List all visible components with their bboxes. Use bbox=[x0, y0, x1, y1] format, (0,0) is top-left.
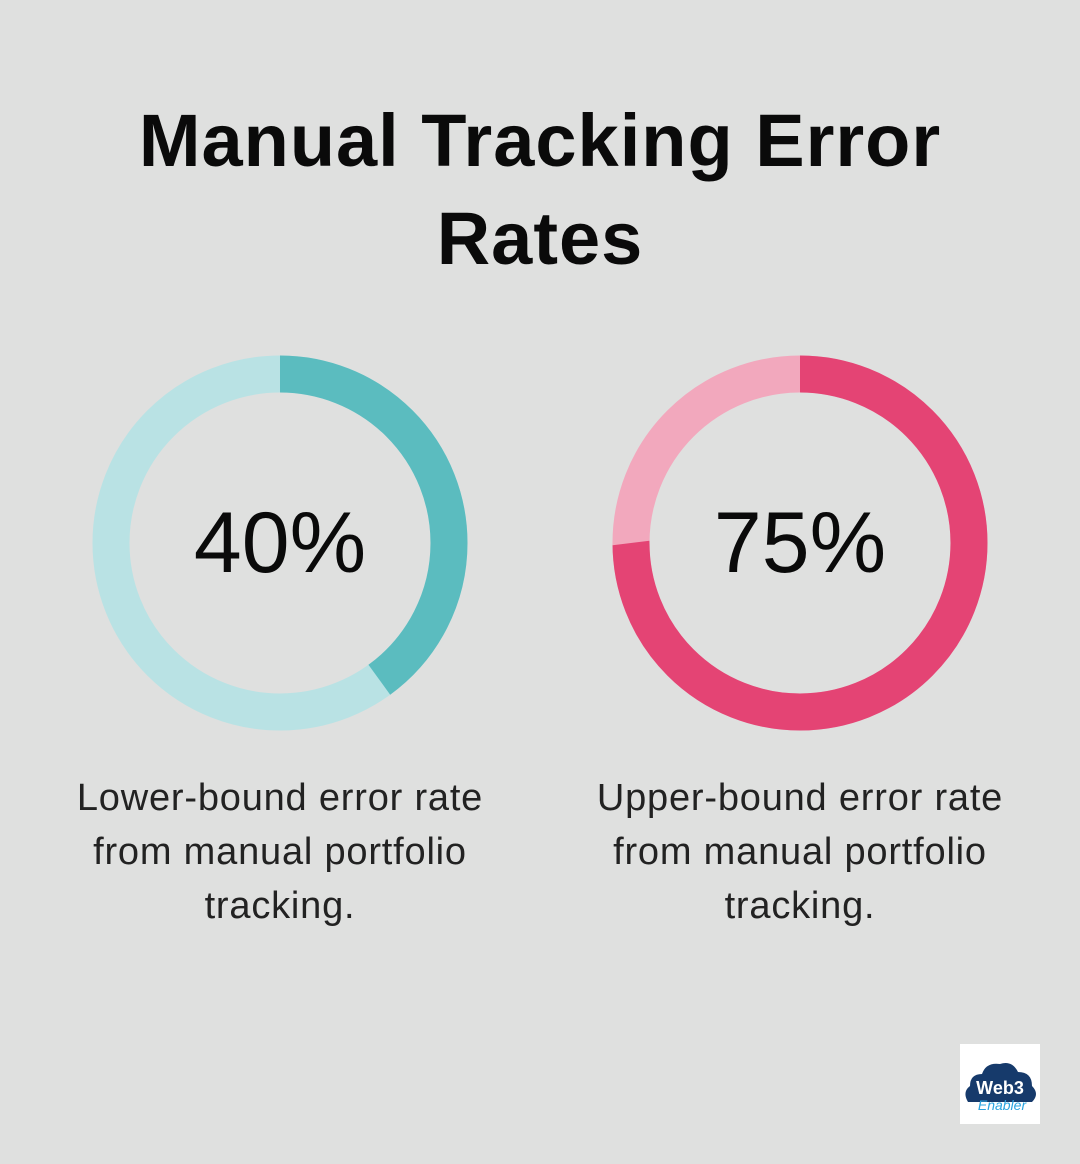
caption left: Lower-bound error rate from manual portfolio tracking. bbox=[77, 777, 483, 927]
logo: Enabler bbox=[978, 1097, 1027, 1113]
donut: 40%: 40% bbox=[194, 495, 366, 591]
title: Manual Tracking Error bbox=[139, 99, 941, 182]
logo: Web3 bbox=[976, 1078, 1024, 1098]
title: Rates bbox=[437, 197, 643, 280]
donut: 40% bbox=[92, 356, 468, 730]
donut: 75%: 75% bbox=[714, 495, 886, 591]
title bbox=[139, 99, 941, 280]
caption right: Upper-bound error rate from manual portfolio tracking. bbox=[597, 777, 1003, 927]
logo bbox=[960, 1044, 1040, 1124]
donut: 75% bbox=[612, 356, 988, 730]
